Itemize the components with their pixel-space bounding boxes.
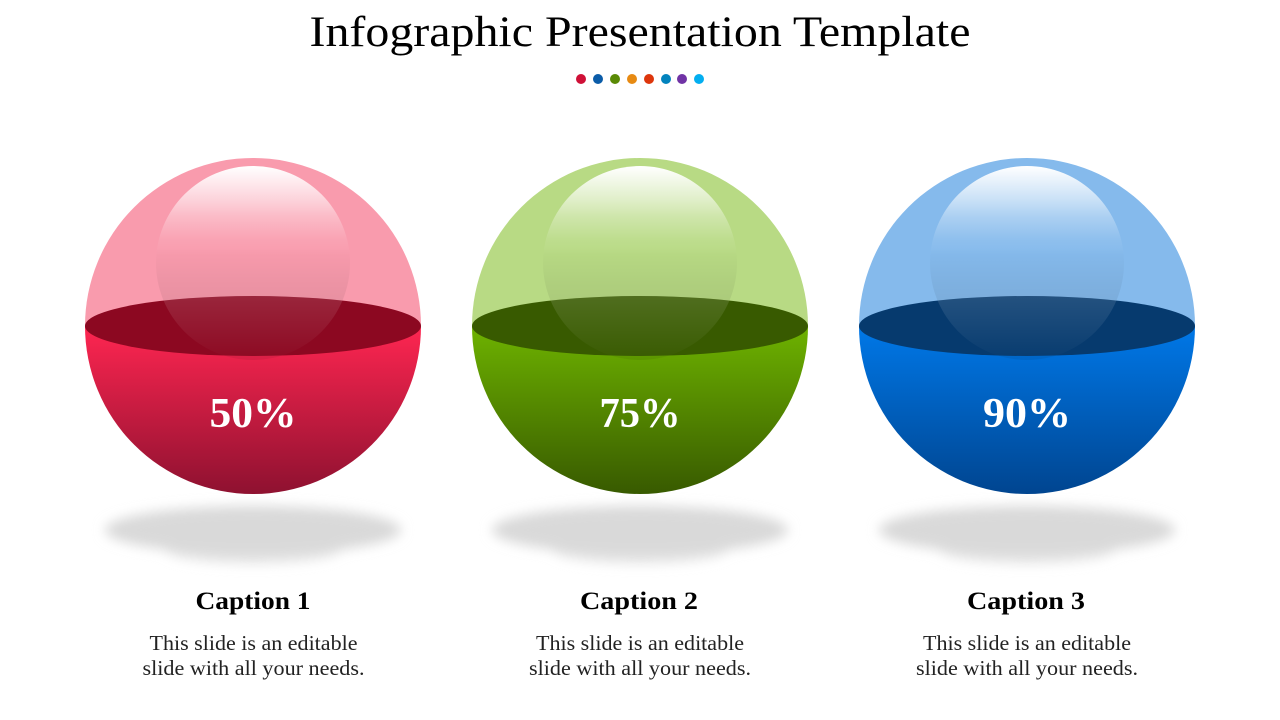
- decorative dot row: [576, 74, 704, 84]
- panel: caption 3 sphere: [859, 158, 1195, 563]
- lower liquid bowl: [85, 326, 421, 494]
- percentage: 90%: [983, 391, 1071, 437]
- panel: caption 2 sphere: [472, 158, 808, 563]
- caption 3 text: This slide is an editable: [923, 631, 1131, 655]
- lower liquid bowl: [859, 326, 1195, 494]
- highlight over surface: [550, 296, 730, 345]
- glass highlight: [543, 166, 737, 360]
- caption 2 heading: Caption 2: [580, 588, 698, 615]
- glass highlight: [930, 166, 1124, 360]
- caption 2 text: This slide is an editable: [536, 631, 744, 655]
- upper glass dome: [472, 158, 808, 326]
- upper glass dome: [85, 158, 421, 326]
- liquid surface ellipse: [85, 296, 421, 356]
- caption 3 text: [916, 631, 1138, 680]
- caption 2 text: [529, 631, 751, 680]
- lower liquid bowl: [472, 326, 808, 494]
- caption 1 text: [142, 631, 364, 680]
- caption 1 text: This slide is an editable: [150, 631, 358, 655]
- glass highlight: [156, 166, 350, 360]
- liquid surface ellipse: [472, 296, 808, 356]
- liquid surface ellipse: [859, 296, 1195, 356]
- panel: caption 1 sphere: [85, 158, 421, 563]
- caption 1 text: slide with all your needs.: [142, 656, 364, 680]
- caption 3 text: slide with all your needs.: [916, 656, 1138, 680]
- caption 3 heading: Caption 3: [967, 588, 1085, 615]
- sphere shadow: [105, 506, 401, 563]
- sphere shadow: [492, 506, 788, 563]
- caption 1 heading: Caption 1: [196, 588, 310, 615]
- highlight over surface: [938, 296, 1116, 344]
- caption 2 text: slide with all your needs.: [529, 656, 751, 680]
- percentage: 50%: [210, 391, 296, 437]
- highlight over surface: [164, 296, 342, 344]
- sphere shadow: [879, 506, 1175, 563]
- title: Infographic Presentation Template: [310, 9, 970, 56]
- upper glass dome: [859, 158, 1195, 326]
- percentage: 75%: [600, 391, 680, 437]
